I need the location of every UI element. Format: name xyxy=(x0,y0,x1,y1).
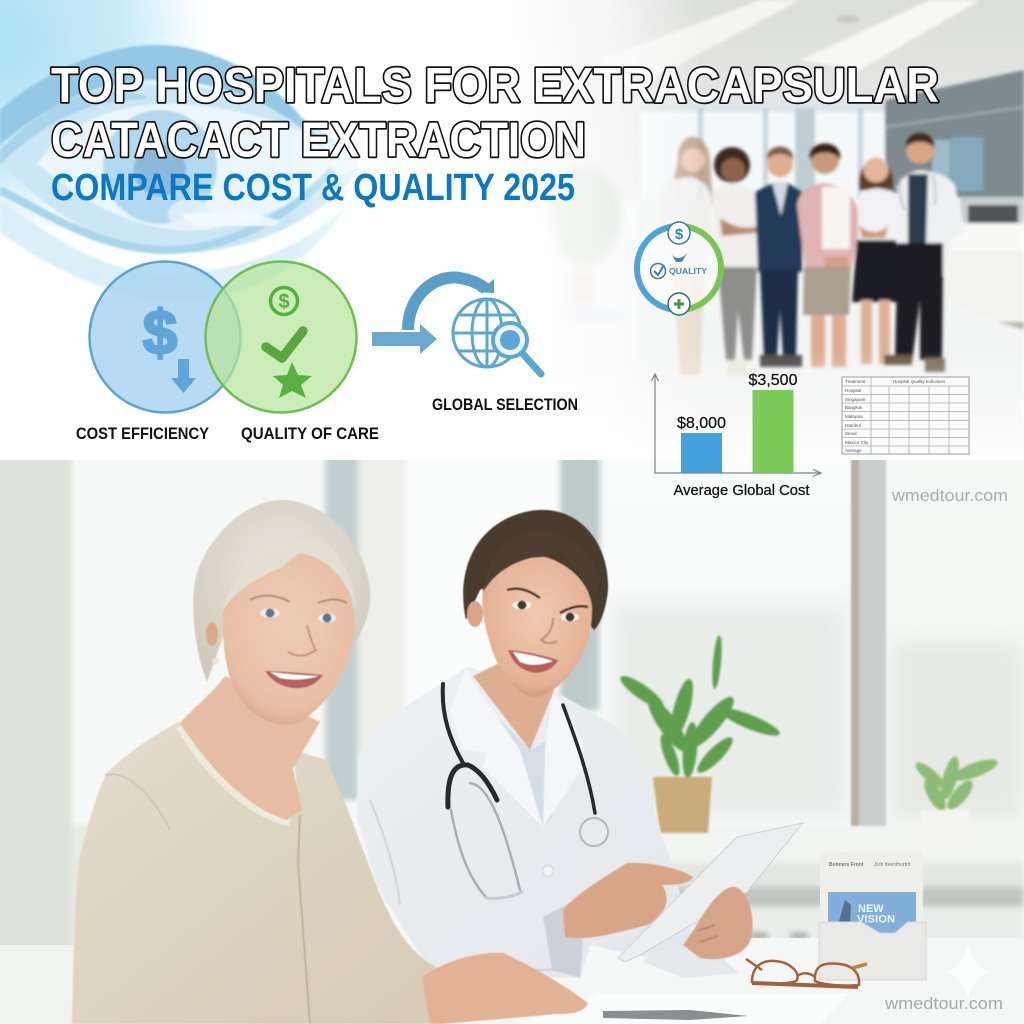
icon: star xyxy=(273,362,312,398)
comparison table: Hospital xyxy=(845,388,861,393)
title: CATACACT EXTRACTION xyxy=(51,114,586,168)
hair back xyxy=(463,510,608,630)
comparison table: Bangkok xyxy=(845,405,863,410)
doctor's hand holding tablet xyxy=(683,887,753,959)
icon: globe with magnifier xyxy=(453,299,541,374)
swept fringe xyxy=(222,540,357,612)
title xyxy=(51,59,939,209)
icon: dollar sign: $ xyxy=(143,299,177,368)
comparison table: Mexico City xyxy=(845,440,869,445)
group of six staff xyxy=(660,133,965,376)
chart caption: Average Global Cost xyxy=(674,483,810,499)
tablet xyxy=(618,823,803,962)
doctor xyxy=(357,510,738,978)
comparison table: Treatment xyxy=(845,379,866,384)
brochure holder xyxy=(819,851,926,980)
glasses xyxy=(746,959,867,987)
faded potted plant xyxy=(558,168,622,300)
icon: down arrow xyxy=(171,359,196,393)
bar chart: average global cost xyxy=(652,372,821,499)
decorative eye background xyxy=(0,0,400,330)
small potted plant xyxy=(912,755,1000,850)
cardigan xyxy=(72,722,445,1024)
hospital interior photo xyxy=(554,0,1024,392)
quality ring icon: QUALITY xyxy=(669,267,708,276)
patient: elderly woman xyxy=(72,500,588,1024)
doctor's sleeve and far cuff xyxy=(643,946,738,978)
comparison table: Singapore xyxy=(845,397,866,402)
label: global selection: GLOBAL SELECTION xyxy=(432,395,578,414)
ear xyxy=(206,622,218,646)
label: cost efficiency: COST EFFICIENCY xyxy=(76,424,210,443)
icon: check mark xyxy=(266,331,303,358)
label: quality of care: QUALITY OF CARE xyxy=(241,424,379,443)
axes xyxy=(652,374,821,476)
subtitle: COMPARE COST & QUALITY 2025 xyxy=(51,167,575,209)
document and pen xyxy=(520,993,850,1024)
arrow: curved to globe xyxy=(408,278,494,330)
sparkle mark xyxy=(944,945,992,998)
comparison table: Seoul xyxy=(845,431,857,436)
stethoscope xyxy=(443,684,608,898)
top section background xyxy=(0,0,1024,460)
bar: $8,000: $8,000 xyxy=(677,415,726,432)
neck xyxy=(473,660,562,750)
sleeve cuff xyxy=(398,975,432,1024)
quality ring icon xyxy=(637,222,721,315)
comparison table: Average xyxy=(845,448,862,453)
bar: $3,500: $3,500 xyxy=(749,372,798,389)
soft fade at junction behind chart xyxy=(610,460,850,515)
ear xyxy=(467,601,483,627)
icon: dollar coin: $ xyxy=(278,291,290,313)
watermark: top: wmedtour.com xyxy=(891,487,1008,505)
quality ring icon: $ xyxy=(675,226,684,243)
doctor's pointing hand and cuff xyxy=(543,863,693,978)
bar: $8,000 xyxy=(677,415,726,473)
brochure holder: VISION xyxy=(857,914,895,926)
face xyxy=(223,553,355,725)
venn diagram: cost efficiency and quality of care xyxy=(90,262,356,412)
white coat xyxy=(357,667,738,978)
comparison table: Istanbul xyxy=(845,423,861,428)
table xyxy=(470,938,1024,1024)
comparison table xyxy=(842,377,969,454)
bar: $3,500 xyxy=(749,372,798,473)
icon: dollar coin xyxy=(270,288,298,314)
neck and chest xyxy=(180,676,320,820)
title: TOP HOSPITALS FOR EXTRACAPSULAR xyxy=(51,59,939,113)
brochure holder: NEW xyxy=(858,903,884,915)
bottom photo: patient and doctor xyxy=(0,450,1024,1024)
brochure holder: Bonners Front xyxy=(829,862,864,868)
window wall background xyxy=(0,450,1024,1024)
arrow: straight to globe xyxy=(372,324,437,354)
brochure holder: Jt.th Iteenthurtrd xyxy=(874,862,911,868)
comparison table: Malaysia xyxy=(845,414,863,419)
hand xyxy=(422,953,588,1024)
face xyxy=(482,557,592,697)
comparison table: Hospital Quality Indicators xyxy=(893,379,946,384)
watermark: bottom: wmedtour.com xyxy=(884,995,1003,1013)
potted plant xyxy=(617,635,782,833)
hair xyxy=(193,500,370,682)
